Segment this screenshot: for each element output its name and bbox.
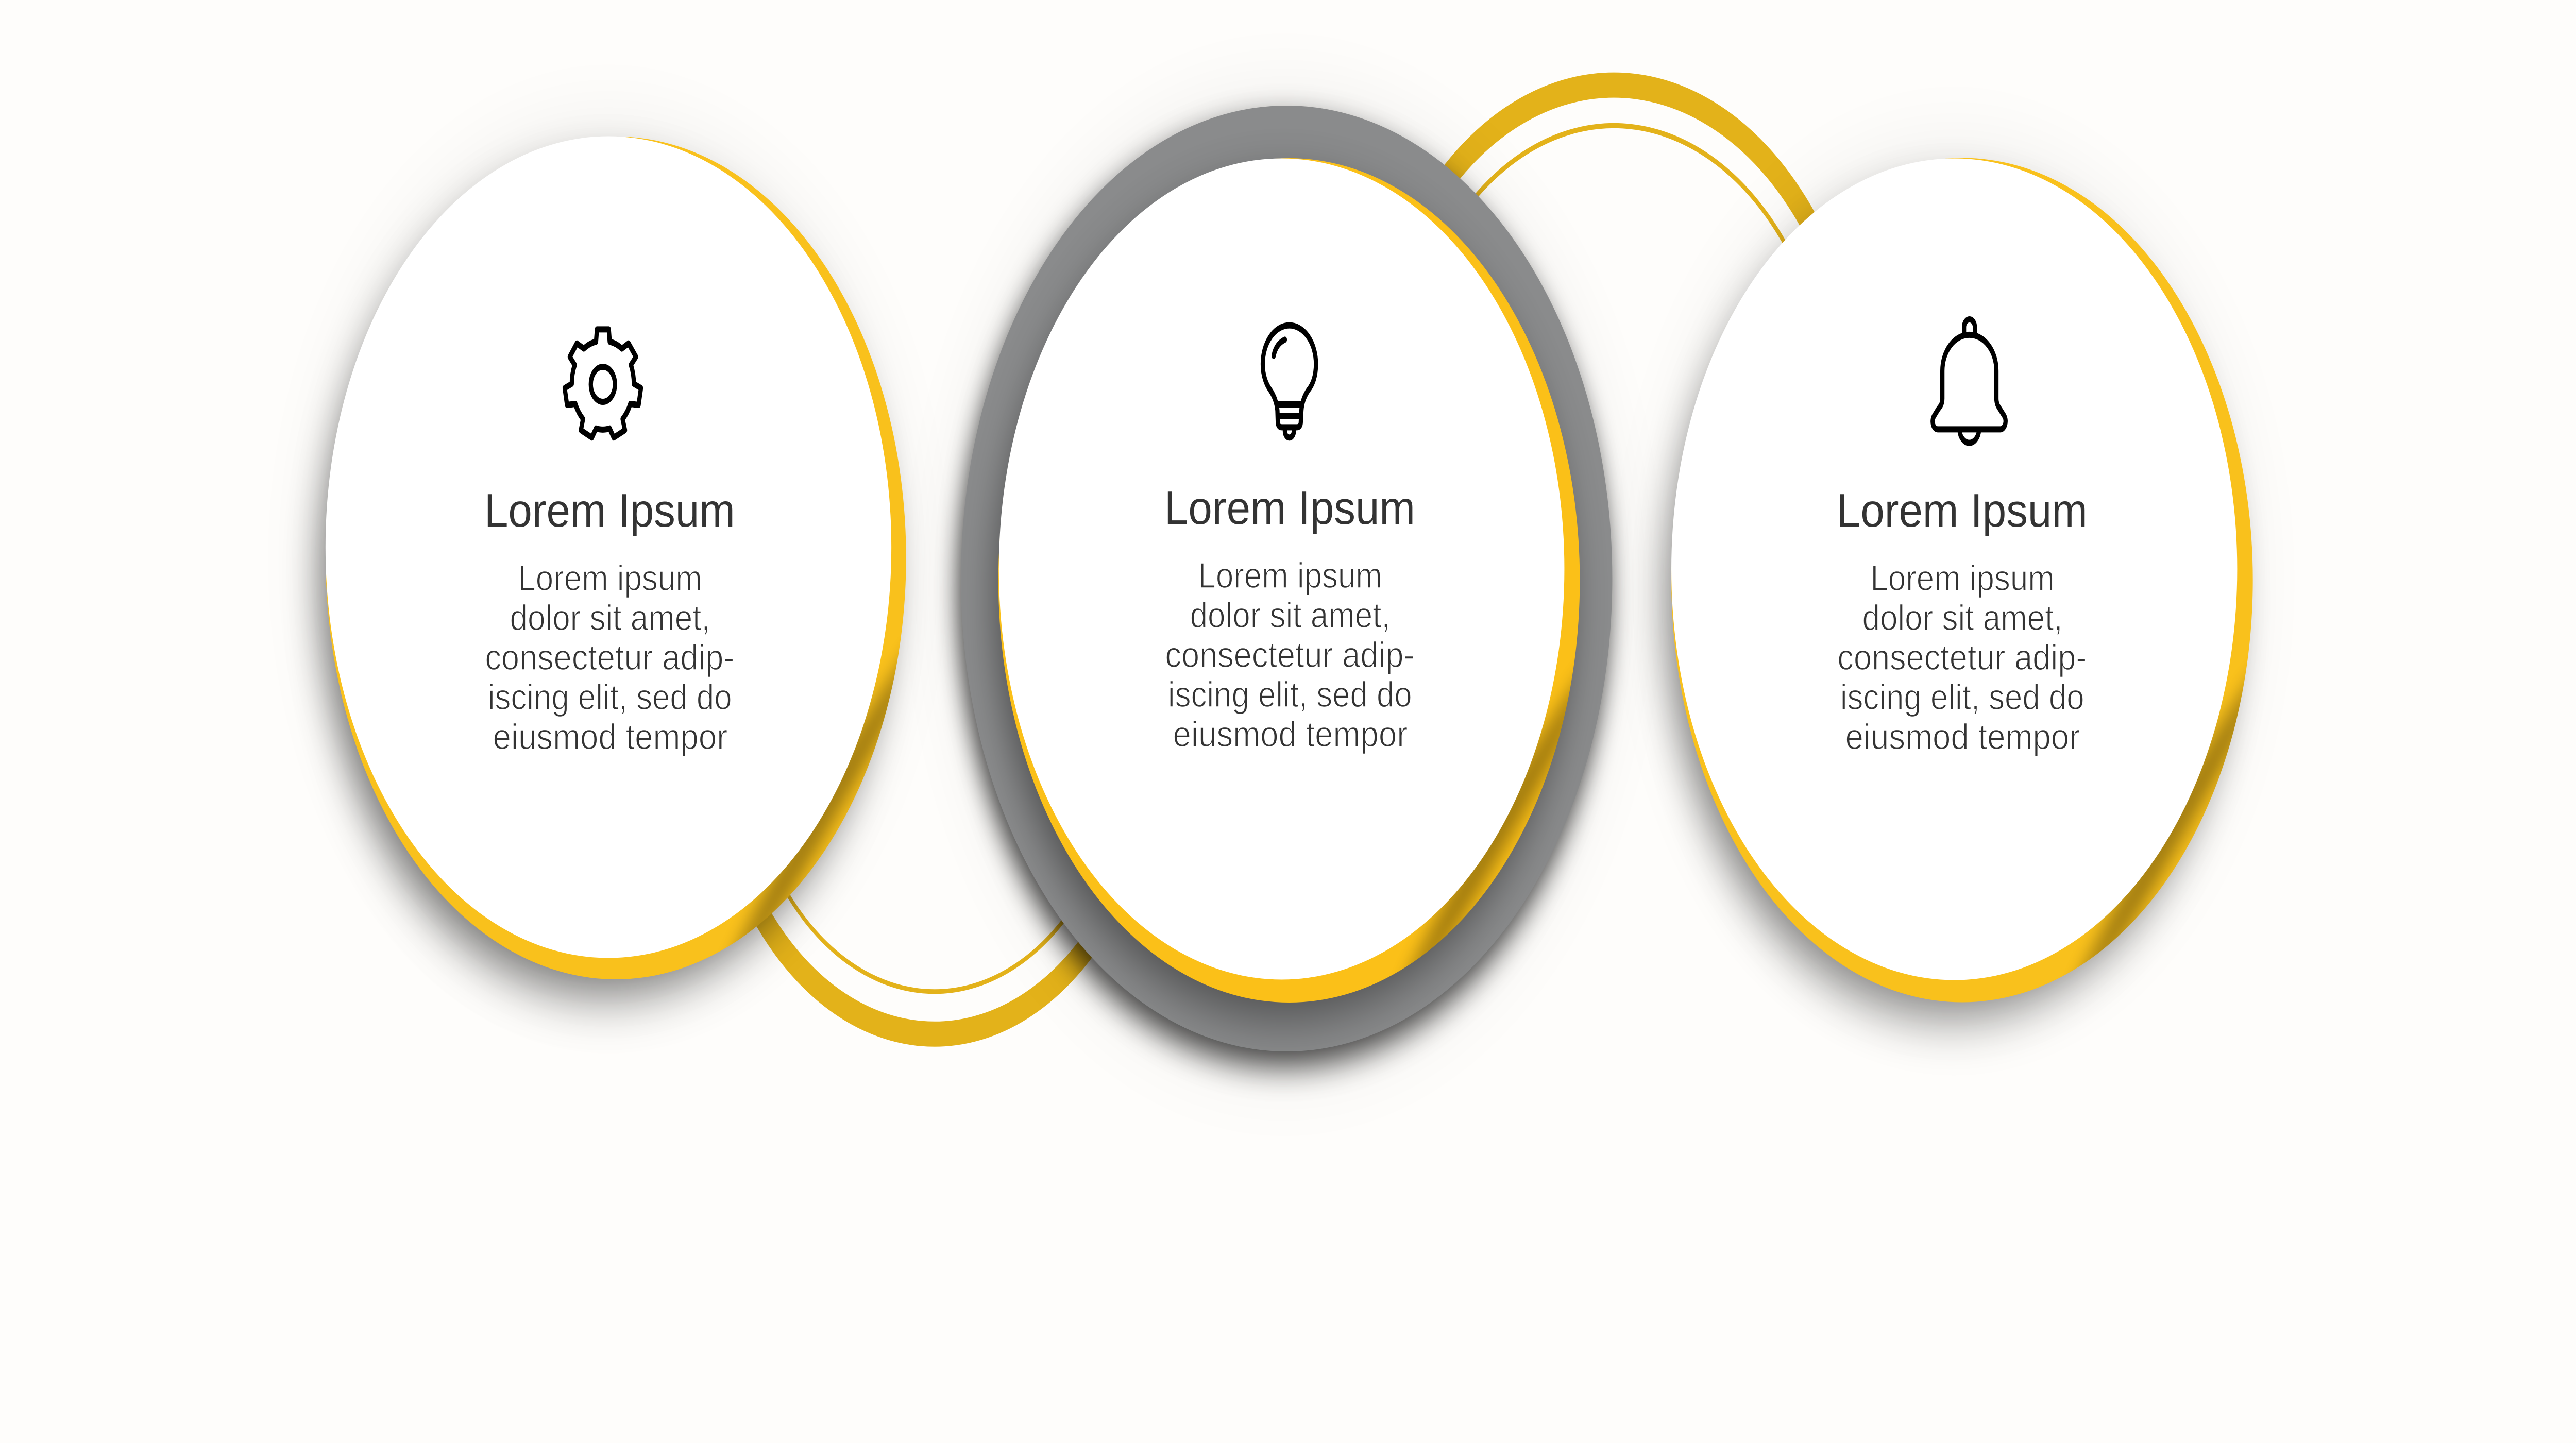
text block 1: Lorem ipsum bbox=[518, 558, 702, 598]
text block 1: consectetur adip- bbox=[485, 637, 734, 677]
text block 3: consectetur adip- bbox=[1837, 637, 2087, 677]
icon: gear bbox=[565, 329, 641, 437]
text block 2 bbox=[1165, 555, 1414, 754]
text block 2: dolor sit amet, bbox=[1190, 595, 1391, 635]
icon: light bulb bbox=[1263, 326, 1316, 437]
heading 1: Lorem Ipsum bbox=[484, 484, 735, 537]
text block 1: iscing elit, sed do bbox=[488, 677, 732, 717]
text block 3: iscing elit, sed do bbox=[1840, 677, 2084, 717]
upper connector ring bbox=[1429, 85, 1822, 271]
lower connector ring bbox=[751, 871, 1101, 1034]
white disc 1 bbox=[326, 136, 891, 958]
text block 1 bbox=[485, 558, 734, 757]
text block 3: Lorem ipsum bbox=[1870, 558, 2055, 598]
panel: step 1 gear bbox=[316, 134, 931, 994]
text block 2: Lorem ipsum bbox=[1198, 555, 1382, 596]
text block 2: iscing elit, sed do bbox=[1168, 674, 1412, 715]
white disc 2 bbox=[999, 159, 1564, 980]
heading 3: Lorem Ipsum bbox=[1837, 484, 2088, 537]
text block 1: dolor sit amet, bbox=[510, 598, 710, 638]
text block 2: eiusmod tempor bbox=[1173, 714, 1408, 754]
panel: step 2 bulb bbox=[953, 103, 1616, 1066]
white disc 3 bbox=[1671, 159, 2237, 980]
text block 2: consectetur adip- bbox=[1165, 635, 1414, 675]
heading 2: Lorem Ipsum bbox=[1164, 481, 1415, 534]
icon: bell bbox=[1933, 319, 2006, 443]
panel: step 3 bell bbox=[1662, 156, 2277, 1016]
text block 3 bbox=[1837, 558, 2087, 757]
text block 3: eiusmod tempor bbox=[1845, 717, 2080, 757]
text block 1: eiusmod tempor bbox=[493, 717, 727, 757]
grey backing disc bbox=[961, 106, 1612, 1051]
text block 3: dolor sit amet, bbox=[1862, 598, 2063, 638]
